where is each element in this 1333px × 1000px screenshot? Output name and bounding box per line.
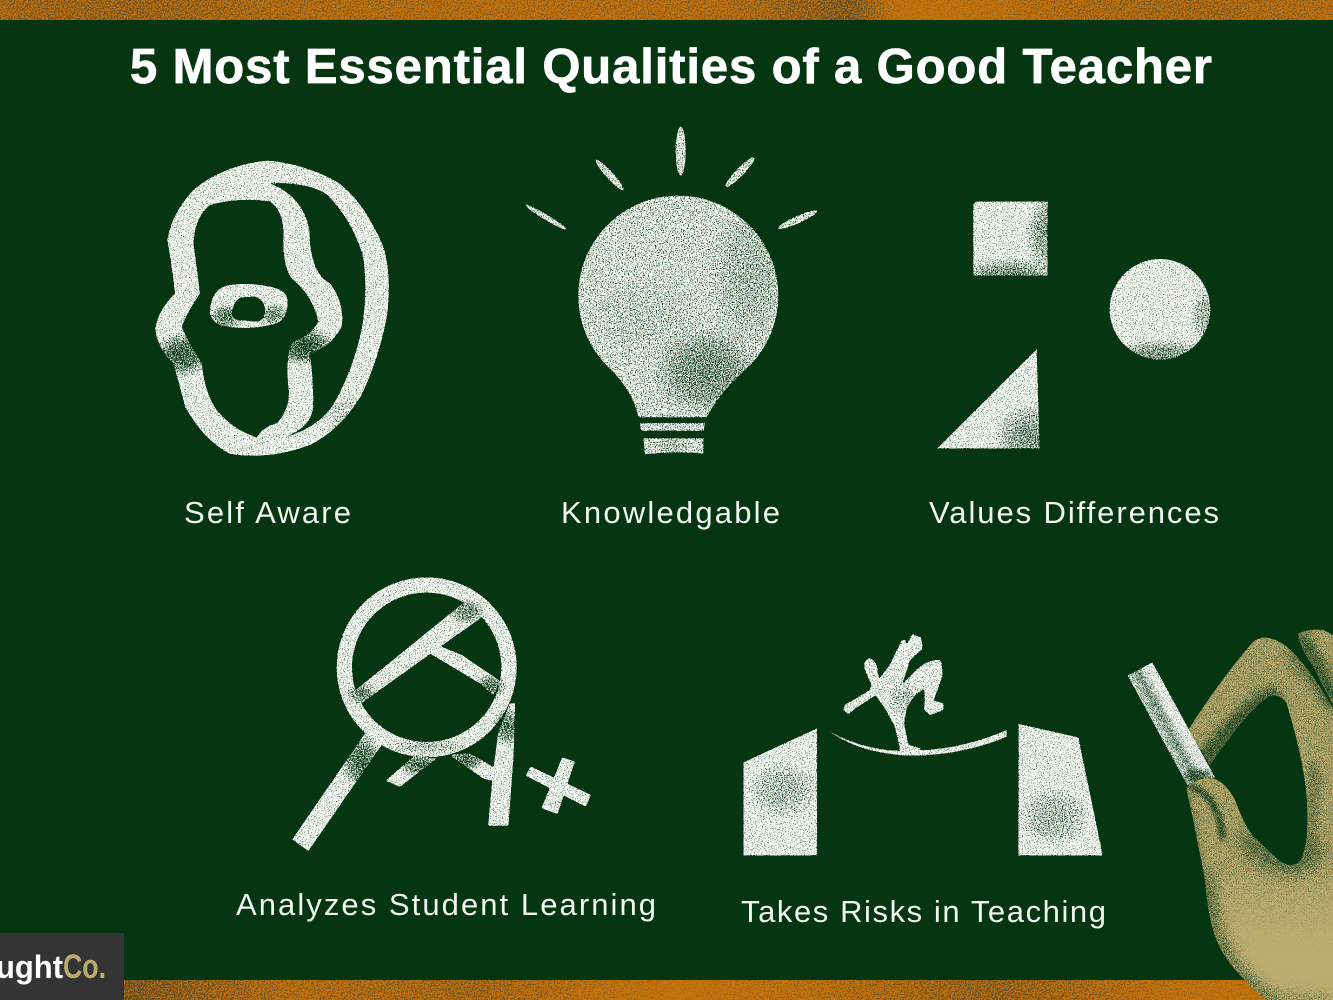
icon: light bulb bbox=[524, 127, 819, 454]
left cliff bbox=[743, 728, 817, 855]
right cliff bbox=[1018, 724, 1103, 855]
rope bbox=[829, 730, 1007, 756]
hand shading bbox=[1177, 620, 1333, 1000]
logo: Co. bbox=[63, 948, 106, 986]
label: self aware: Self Aware bbox=[184, 495, 351, 530]
wooden frame: top bbox=[0, 0, 1333, 20]
light rays bbox=[524, 127, 819, 232]
label: values differences: Values Differences bbox=[929, 495, 1219, 530]
hand fill bbox=[1187, 630, 1333, 1000]
icon: self aware head bbox=[155, 161, 389, 456]
chalk stick backing bbox=[1128, 662, 1215, 785]
lens ring bbox=[344, 585, 509, 750]
wooden frame: bottom bbox=[0, 980, 1333, 1000]
letter A and plus bbox=[354, 603, 591, 826]
handle bbox=[292, 733, 382, 851]
label: analyzes student learning: Analyzes Student Learning bbox=[236, 887, 656, 922]
bulb base bbox=[640, 423, 705, 454]
icon: magnifying glass over A+ bbox=[292, 585, 591, 851]
label: takes risks in teaching: Takes Risks in Teaching bbox=[741, 894, 1106, 929]
title: 5 Most Essential Qualities of a Good Teacher bbox=[130, 40, 1212, 94]
bulb glass bbox=[578, 196, 778, 417]
figure bbox=[843, 634, 943, 755]
icon: tightrope walker between cliffs bbox=[743, 634, 1103, 855]
label: knowledgable: Knowledgable bbox=[561, 495, 780, 530]
logo bbox=[0, 933, 124, 1000]
chalk stick bbox=[1128, 662, 1215, 785]
illustration: hand holding chalk bbox=[1128, 620, 1333, 1000]
icon: square, circle and triangle bbox=[937, 202, 1210, 448]
